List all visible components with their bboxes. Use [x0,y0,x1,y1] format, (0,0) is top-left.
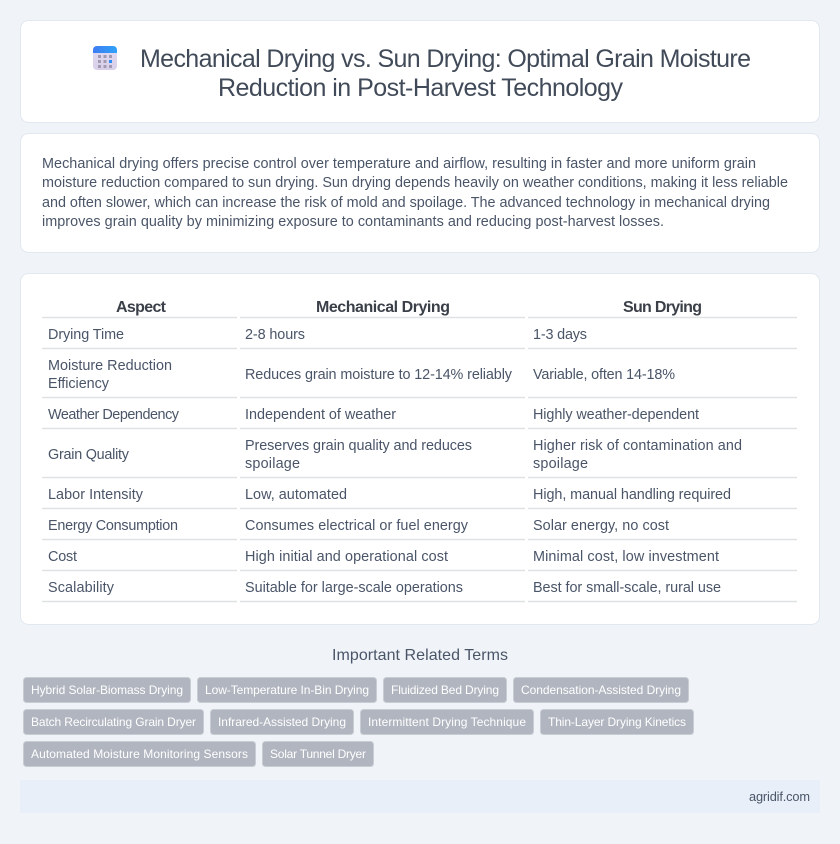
title [140,45,751,102]
tag [198,678,376,702]
tags: related terms [24,678,694,766]
table header: Mechanical Drying [316,299,450,316]
tag [540,710,694,734]
row: moisture reduction efficiency: Reduces grain moisture to 12-14% reliably [245,367,513,383]
row: energy consumption [48,518,669,534]
row: weather dependency: Independent of weather [245,407,396,423]
tag [514,678,688,702]
panel: introduction [20,134,820,252]
row: drying time [48,327,587,343]
tag: Fluidized Bed Drying [391,683,499,697]
tag: Automated Moisture Monitoring Sensors [31,747,248,761]
tag: Low-Temperature In-Bin Drying [205,683,369,697]
tag: Intermittent Drying Technique [368,715,526,729]
row: energy consumption: Energy Consumption [48,518,178,534]
text block: introduction: moisture reduction compared to sun drying. Sun drying depends heavily on weather conditions, making it less reliable [42,175,788,191]
row: cost: High initial and operational cost [245,549,448,565]
tag: Thin-Layer Drying Kinetics [548,715,686,729]
row: moisture reduction efficiency [48,358,675,392]
row: cost: Cost [48,549,77,565]
row: cost: Minimal cost, low investment [533,549,719,565]
row: weather dependency [48,407,699,423]
tag [24,678,190,702]
text block: introduction: Mechanical drying offers precise control over temperature and airflow, resulting in faster and more uniform grain [42,156,756,172]
row: grain quality: spoilage [245,456,300,472]
row: scalability: Scalability [48,580,115,596]
row: labor intensity: High, manual handling required [533,487,731,503]
table header: Sun Drying [623,299,702,316]
row: grain quality: Higher risk of contamination and [533,438,742,454]
tag [210,710,354,734]
row: labor intensity: Labor Intensity [48,487,144,503]
tag: Condensation-Assisted Drying [521,683,681,697]
row: drying time: 2-8 hours [245,327,305,343]
row: drying time: Drying Time [48,327,124,343]
heading: important related terms: Important Related Terms [332,647,508,664]
title: Mechanical Drying vs. Sun Drying: Optimal Grain Moisture [140,45,751,73]
row: grain quality [48,438,742,472]
row: scalability: Suitable for large-scale operations [245,580,463,596]
row: grain quality: Grain Quality [48,447,130,463]
row: moisture reduction efficiency: Efficiency [48,376,110,392]
icon: calendar grid [93,46,117,70]
panel: header [20,20,820,122]
row: drying time: 1-3 days [533,327,587,343]
row: energy consumption: Consumes electrical or fuel energy [245,518,469,534]
tag: Batch Recirculating Grain Dryer [31,715,196,729]
row: energy consumption: Solar energy, no cost [533,518,669,534]
text block: introduction: and often slower, which can increase the risk of mold and spoilage. The advanced technology in mechanical drying [42,195,770,211]
tag [24,742,256,766]
row: labor intensity: Low, automated [245,487,347,503]
row: scalability [48,580,721,596]
table header [116,299,702,316]
tag [384,678,506,702]
footer: agridif.com [749,789,810,804]
tag [262,742,374,766]
row: cost [48,549,719,565]
tag: Solar Tunnel Dryer [270,747,366,761]
row: moisture reduction efficiency: Variable, often 14-18% [533,367,675,383]
row: grain quality: spoilage [533,456,588,472]
tag: Infrared-Assisted Drying [218,715,346,729]
footer [20,780,820,813]
table header: Aspect [116,299,167,316]
text block: introduction: improves grain quality by minimizing exposure to contaminants and reducing post-harvest losses. [42,214,664,230]
row: moisture reduction efficiency: Moisture Reduction [48,358,172,374]
row: labor intensity [48,487,731,503]
row: scalability: Best for small-scale, rural use [533,580,721,596]
row: weather dependency: Weather Dependency [48,407,180,423]
row: grain quality: Preserves grain quality and reduces [245,438,472,454]
text block: introduction [42,156,788,230]
title: Reduction in Post-Harvest Technology [218,74,624,102]
tag: Hybrid Solar-Biomass Drying [31,683,183,697]
tag [24,710,204,734]
panel: comparison table [20,274,820,624]
row: weather dependency: Highly weather-dependent [533,407,699,423]
tag [360,710,534,734]
